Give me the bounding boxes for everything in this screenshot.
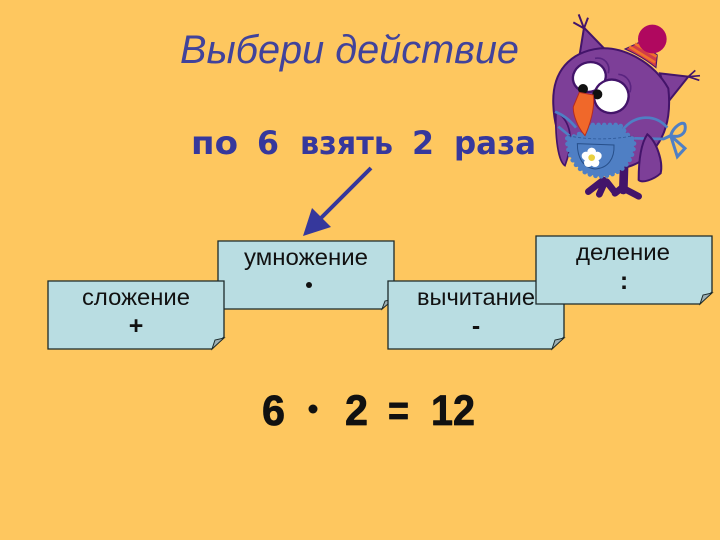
subtitle: problem statement: 2 (412, 124, 434, 162)
card: multiplication (218, 241, 394, 309)
icon: owl character (553, 14, 700, 196)
equation: 12 (431, 387, 475, 435)
owl right ear tuft (660, 70, 700, 102)
owl body (553, 48, 669, 170)
owl left ear tuft (573, 14, 604, 57)
card: division (536, 236, 712, 304)
subtitle: problem statement (191, 124, 536, 162)
owl left eye (569, 58, 610, 96)
card: multiplication: умножение (244, 244, 368, 270)
equation: 6 (262, 387, 285, 435)
owl right wing (639, 134, 661, 181)
card: subtraction: - (472, 312, 480, 340)
owl eyebrows (595, 58, 631, 92)
subtitle: problem statement: 6 (257, 124, 279, 162)
owl right eye (589, 75, 633, 118)
equation (262, 387, 475, 435)
subtitle: problem statement: по (191, 124, 238, 162)
owl beak (573, 92, 594, 136)
apron bow (663, 123, 685, 157)
owl left wing (556, 112, 570, 166)
card: addition: сложение (82, 284, 190, 310)
card: division: : (620, 267, 628, 295)
equation: 2 (345, 387, 368, 435)
arrow pointing to multiplication (303, 168, 371, 236)
subtitle: problem statement: раза (454, 124, 536, 162)
card: addition: + (129, 312, 143, 340)
subtitle: problem statement: взять (300, 124, 393, 162)
title: Выбери действие (180, 28, 519, 72)
card: division: деление (576, 239, 670, 265)
card: subtraction (388, 281, 564, 349)
owl legs and feet (588, 168, 639, 196)
owl apron with flower (555, 112, 667, 176)
owl hat (625, 25, 667, 68)
card: addition (48, 281, 224, 349)
equation: = (388, 387, 409, 435)
card: subtraction: вычитание (417, 284, 535, 310)
